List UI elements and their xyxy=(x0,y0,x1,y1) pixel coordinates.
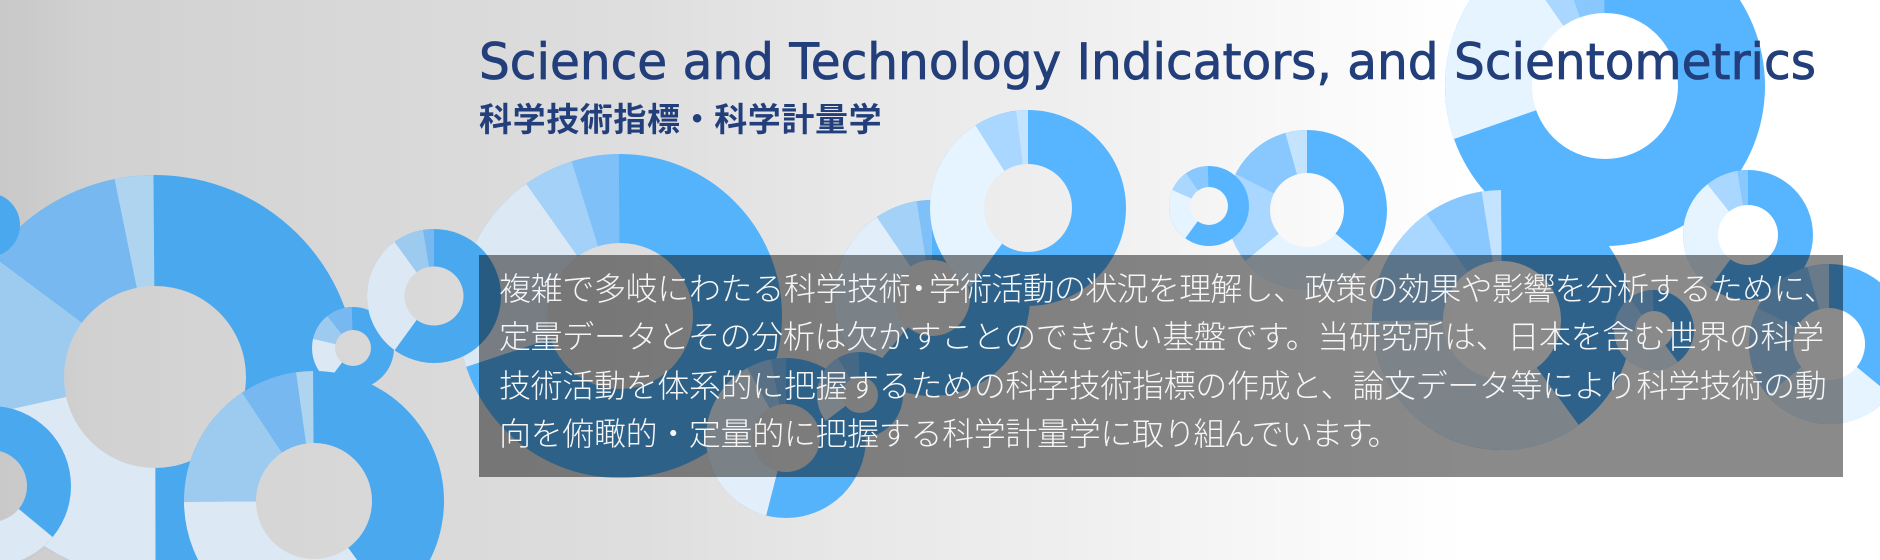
description text: 複雑で多岐にわたる科学技術・学術活動の状況を理解し、政策の効果や影響を分析するために、 xyxy=(499,271,1835,307)
donut chart G: large centre-left xyxy=(458,154,782,478)
donut chart P: small right xyxy=(1614,290,1694,370)
donut chart Q: right edge xyxy=(1749,264,1880,424)
donut chart D: bottom left xyxy=(184,371,444,560)
donut chart K: small upper xyxy=(1169,166,1249,246)
donut chart H: bottom centre xyxy=(706,358,866,518)
title: Science and Technology Indicators, and Scientometrics xyxy=(479,33,1816,91)
description text: 向を俯瞰的・定量的に把握する科学計量学に取り組んでいます。 xyxy=(499,416,1397,452)
donut chart O: right xyxy=(1683,170,1813,300)
background gap at bottom left xyxy=(28,549,64,560)
donut chart F: small left-centre xyxy=(367,229,501,363)
description text xyxy=(499,271,1835,452)
donut chart E2: small lower centre xyxy=(817,352,903,438)
donut chart J: centre xyxy=(834,200,1030,396)
subtitle: 科学技術指標・科学計量学 xyxy=(479,101,882,138)
donut chart E: small left xyxy=(312,307,394,389)
donut chart L: upper right-centre xyxy=(1227,130,1387,290)
description text: 技術活動を体系的に把握するための科学技術指標の作成と、論文データ等により科学技術の動 xyxy=(499,368,1826,404)
description text: 定量データとその分析は欠かすことのできない基盤です。当研究所は、日本を含む世界の科学 xyxy=(499,319,1824,355)
donut chart A: large left xyxy=(0,175,357,560)
donut chart C: lower left edge xyxy=(0,406,71,560)
donut chart M: lower right-centre xyxy=(1372,190,1632,450)
donut chart I: upper centre xyxy=(930,110,1126,306)
donut chart N: large top right xyxy=(1445,0,1765,246)
donut chart B: left edge fragment xyxy=(0,193,20,257)
description panel xyxy=(479,255,1843,477)
